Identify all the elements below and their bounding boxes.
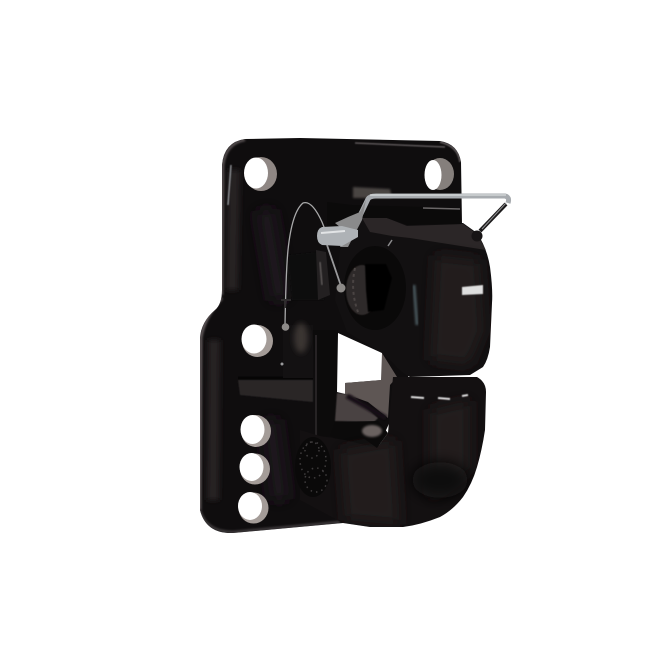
adjustment hole 1 xyxy=(242,324,273,357)
locking pin xyxy=(317,226,358,246)
cable crimp xyxy=(281,300,291,308)
centre post with window cut-out xyxy=(313,330,345,437)
dark block behind latch xyxy=(327,202,461,230)
retaining wire cable xyxy=(285,203,326,325)
slot highlight xyxy=(423,208,460,209)
cable end ball xyxy=(282,323,289,331)
grey latch wedge xyxy=(330,353,397,448)
pin lanyard with ball xyxy=(327,245,346,292)
adjustment hole 4 xyxy=(238,492,268,524)
lower hook jaw xyxy=(295,377,486,527)
raised rib xyxy=(238,323,313,402)
adjustment hole 2 xyxy=(240,415,271,447)
mounting plate xyxy=(200,138,462,533)
window opening xyxy=(337,333,382,394)
adjustment hole 3 xyxy=(240,453,270,484)
hex bolt xyxy=(344,246,406,330)
rear nut xyxy=(288,250,330,300)
product photo: pintle hook xyxy=(200,138,511,533)
steel pin handle xyxy=(357,195,509,242)
mounting hole top left xyxy=(244,157,277,191)
mounting hole top right xyxy=(424,158,454,190)
pin clip plate xyxy=(335,200,366,247)
upper hook latch xyxy=(362,218,492,377)
